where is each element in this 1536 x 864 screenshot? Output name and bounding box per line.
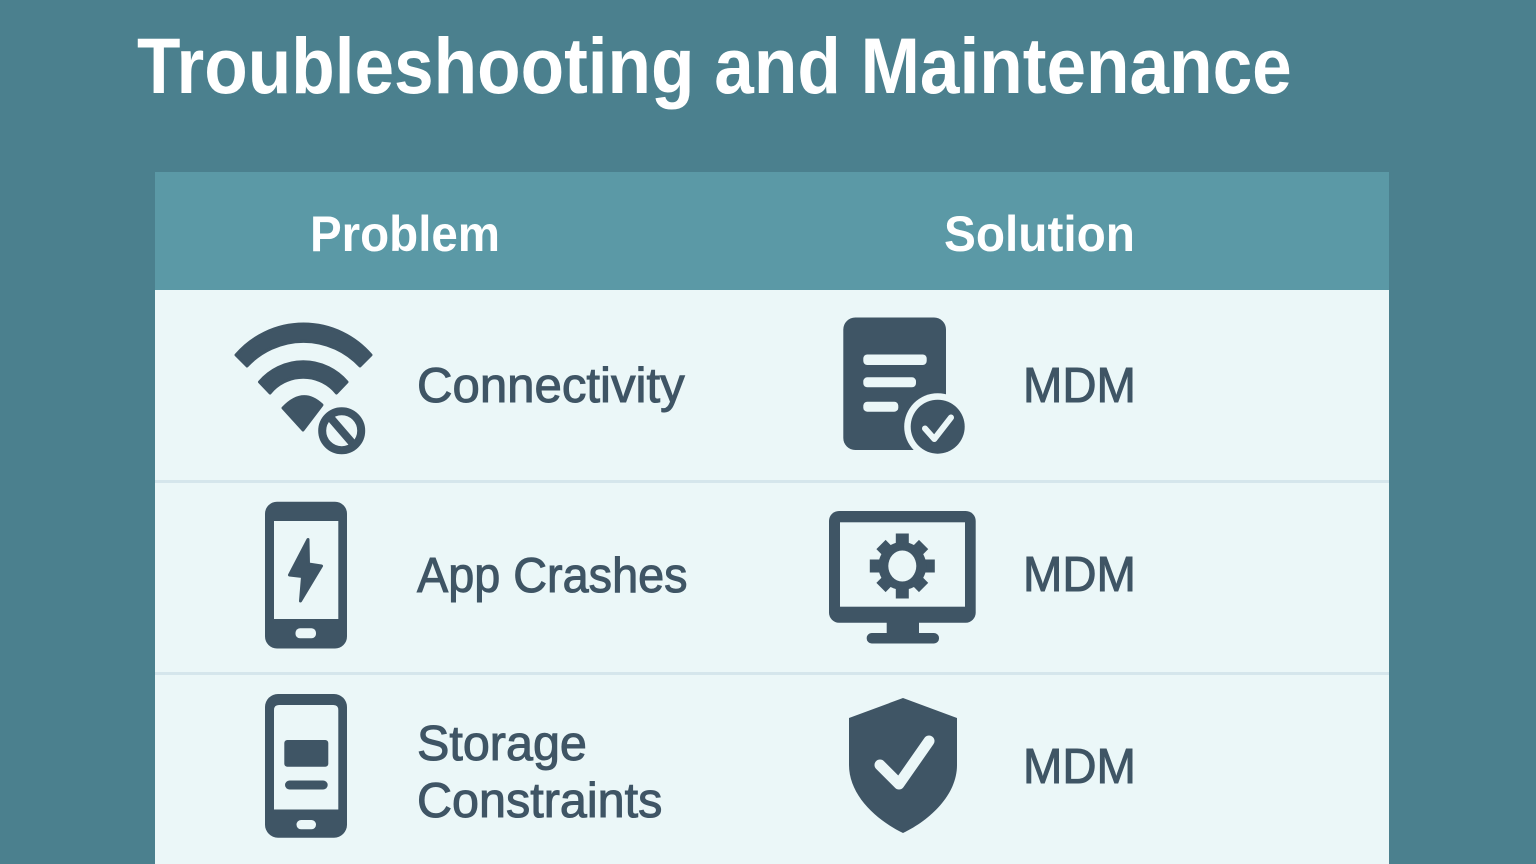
icon: document with check xyxy=(843,318,965,454)
text: MDM row 1: MDM xyxy=(1023,359,1136,413)
text: Storage Constraints xyxy=(417,717,662,828)
icon: phone with storage xyxy=(265,694,347,838)
text: MDM row 2: MDM xyxy=(1023,548,1136,602)
icon: wifi blocked xyxy=(234,322,372,454)
table header band xyxy=(155,172,1389,290)
icon: shield with check xyxy=(849,698,957,833)
heading: Problem: Problem xyxy=(310,206,500,262)
icon: phone with bolt xyxy=(265,502,347,648)
text: Connectivity: Connectivity xyxy=(417,359,685,413)
text: Storage Constraints: Constraints xyxy=(417,774,662,828)
row divider 1 xyxy=(155,480,1389,483)
text: Storage Constraints: Storage xyxy=(417,717,587,771)
panel: table xyxy=(155,172,1389,864)
text: App Crashes: App Crashes xyxy=(417,549,688,603)
row divider 2 xyxy=(155,672,1389,675)
title: Troubleshooting and Maintenance xyxy=(137,21,1292,110)
icon: monitor with gear xyxy=(829,511,976,644)
text: MDM row 3: MDM xyxy=(1023,740,1136,794)
heading: Solution: Solution xyxy=(944,206,1135,262)
